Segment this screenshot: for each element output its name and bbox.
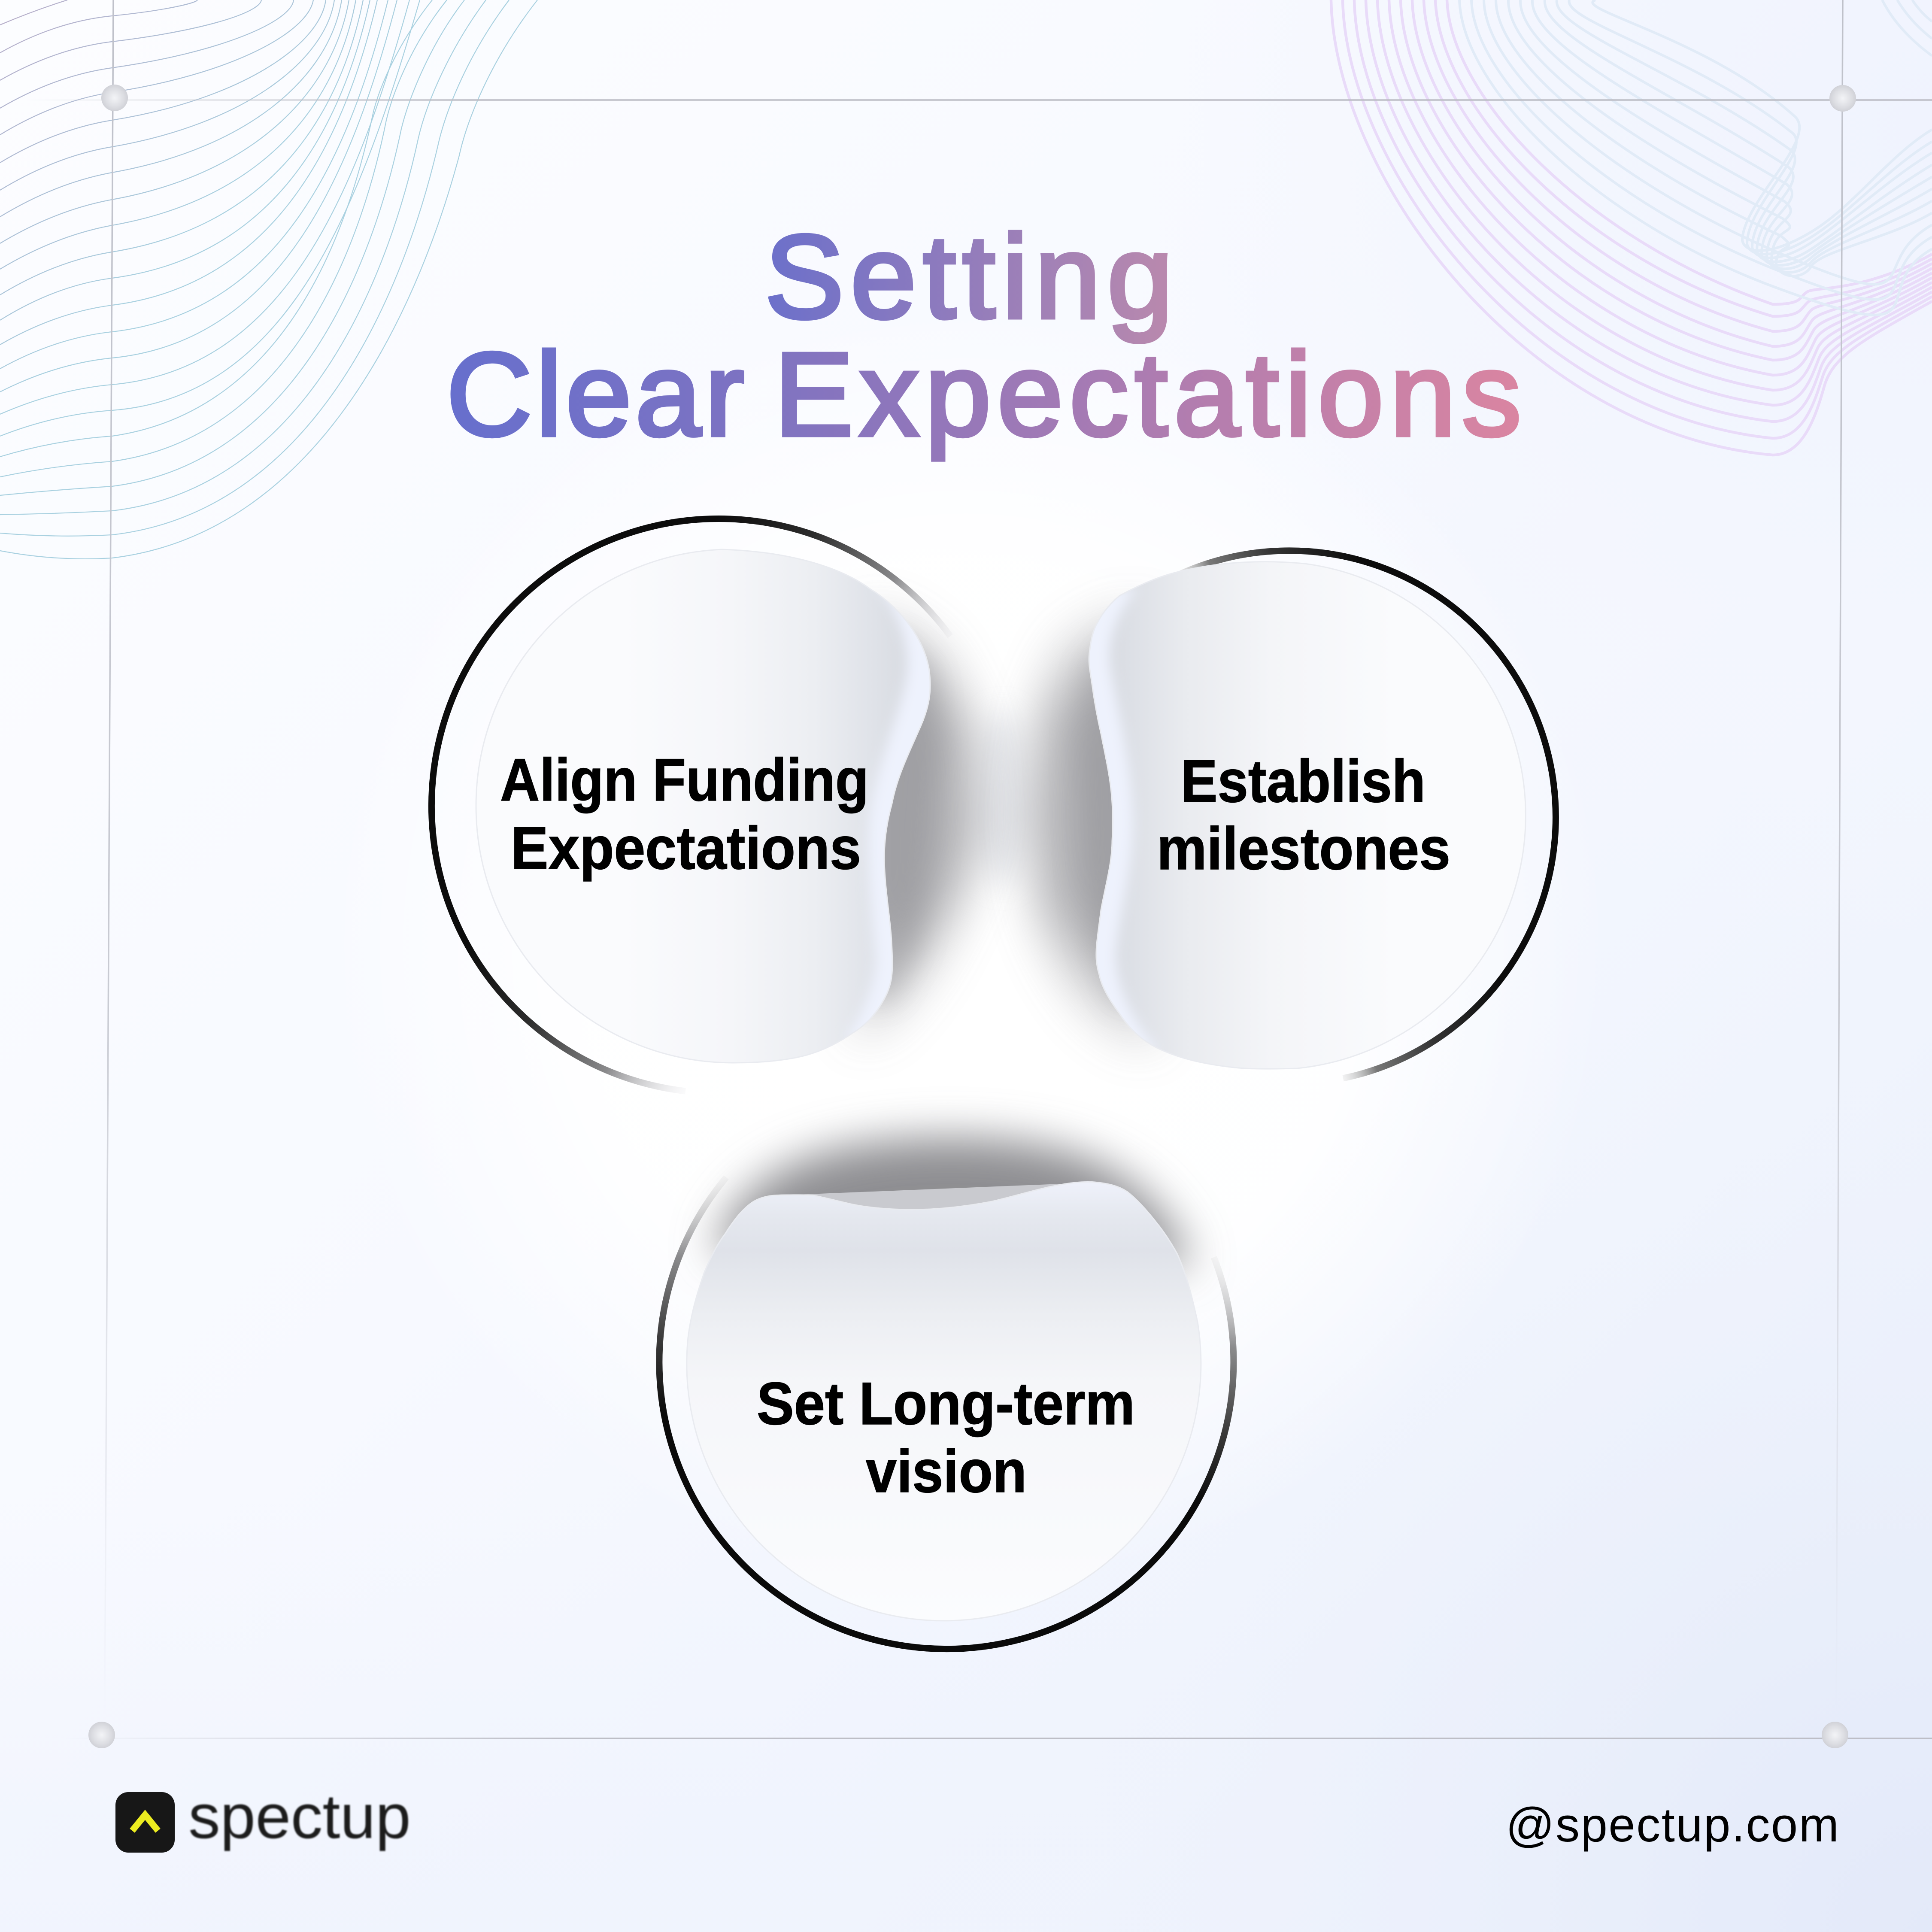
shadow: sticker one peel [854,610,981,1043]
sticker two [1009,554,1567,1077]
label: set long-term vision: vision [866,1438,1027,1505]
label: align funding expectations: Align Funding [500,746,869,813]
wave pattern: top left [0,0,537,559]
sticker two edge [1089,562,1526,1069]
website handle: @spectup.com [1506,1798,1839,1852]
panel: set long-term vision [659,1137,1234,1649]
shadow: sticker two peel [1028,610,1159,1047]
title: Setting [765,211,1173,343]
peel fold band [798,1184,1060,1215]
title: Expectations [774,328,1521,461]
label: set long-term vision: Set Long-term [757,1370,1135,1437]
wave pattern: top right blue [1459,0,1932,315]
frame node: top left [101,85,128,111]
title [446,211,1521,461]
soft shade between top stickers [977,713,1028,884]
sticker one [694,551,930,1062]
ring: sticker two outline [1177,551,1556,1078]
frame node: top right [1829,85,1856,112]
wave pattern: top right lilac [1331,0,1932,455]
panel: align funding expectations [431,519,981,1091]
title: Clear [446,328,744,461]
label: align funding expectations: Expectations [511,814,861,882]
shadow: sticker three peel [713,1137,1193,1266]
panel: establish milestones [1009,551,1567,1078]
logo: spectup [115,1781,411,1853]
frame node: bottom left [88,1722,115,1748]
wordmark: spectup [188,1781,411,1851]
label: establish milestones: milestones [1157,815,1450,882]
sticker three edge [687,1182,1201,1621]
icon: chevron badge [115,1792,175,1853]
label: establish milestones: Establish [1181,747,1425,815]
ring: sticker one outline [431,519,950,1091]
sticker three [682,1176,1206,1627]
ring: sticker three outline [659,1177,1234,1649]
sticker one edge [476,549,930,1063]
frame node: bottom right [1822,1722,1848,1748]
